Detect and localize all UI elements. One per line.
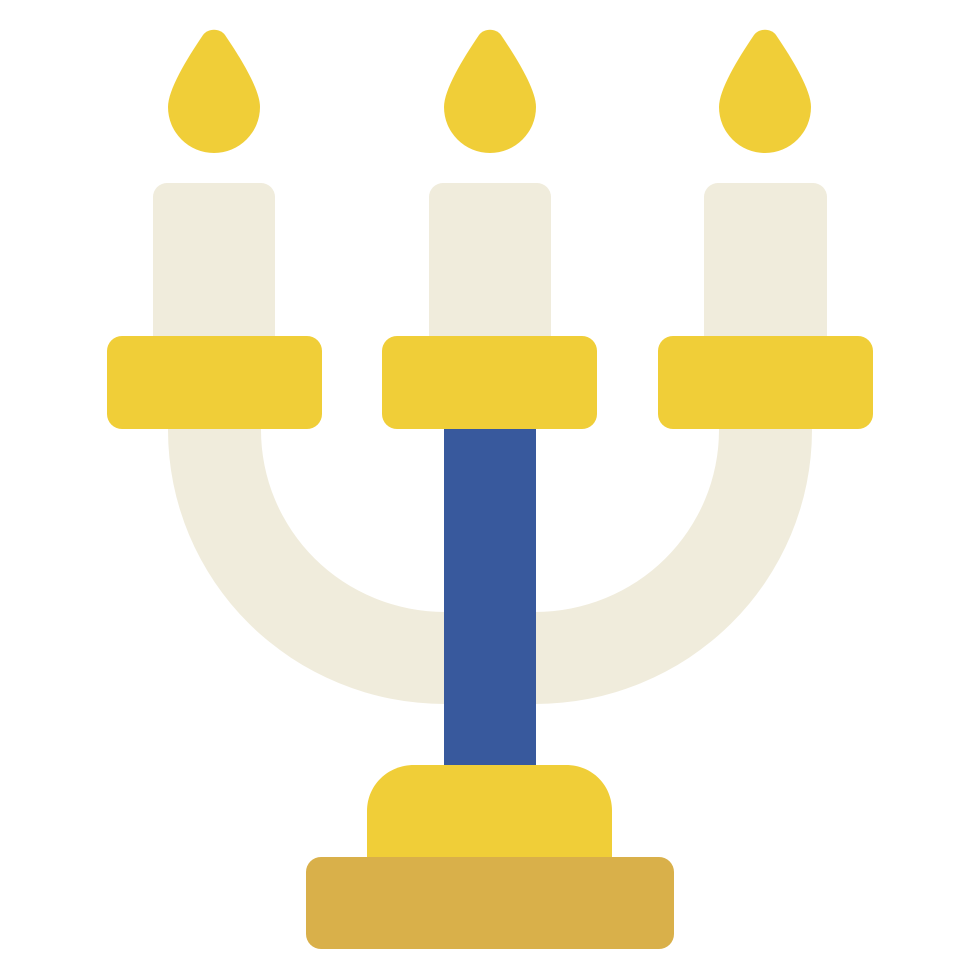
right flame	[719, 30, 811, 153]
middle flame	[444, 30, 536, 153]
middle candle	[429, 183, 551, 353]
upper base	[367, 765, 612, 870]
central stem	[444, 420, 536, 775]
right candle holder	[658, 336, 873, 429]
lower base	[306, 857, 674, 949]
left candle holder	[107, 336, 322, 429]
right candle	[704, 183, 827, 353]
curved arms	[168, 420, 812, 704]
left flame	[168, 30, 260, 153]
left candle	[153, 183, 275, 353]
middle candle holder	[382, 336, 597, 429]
